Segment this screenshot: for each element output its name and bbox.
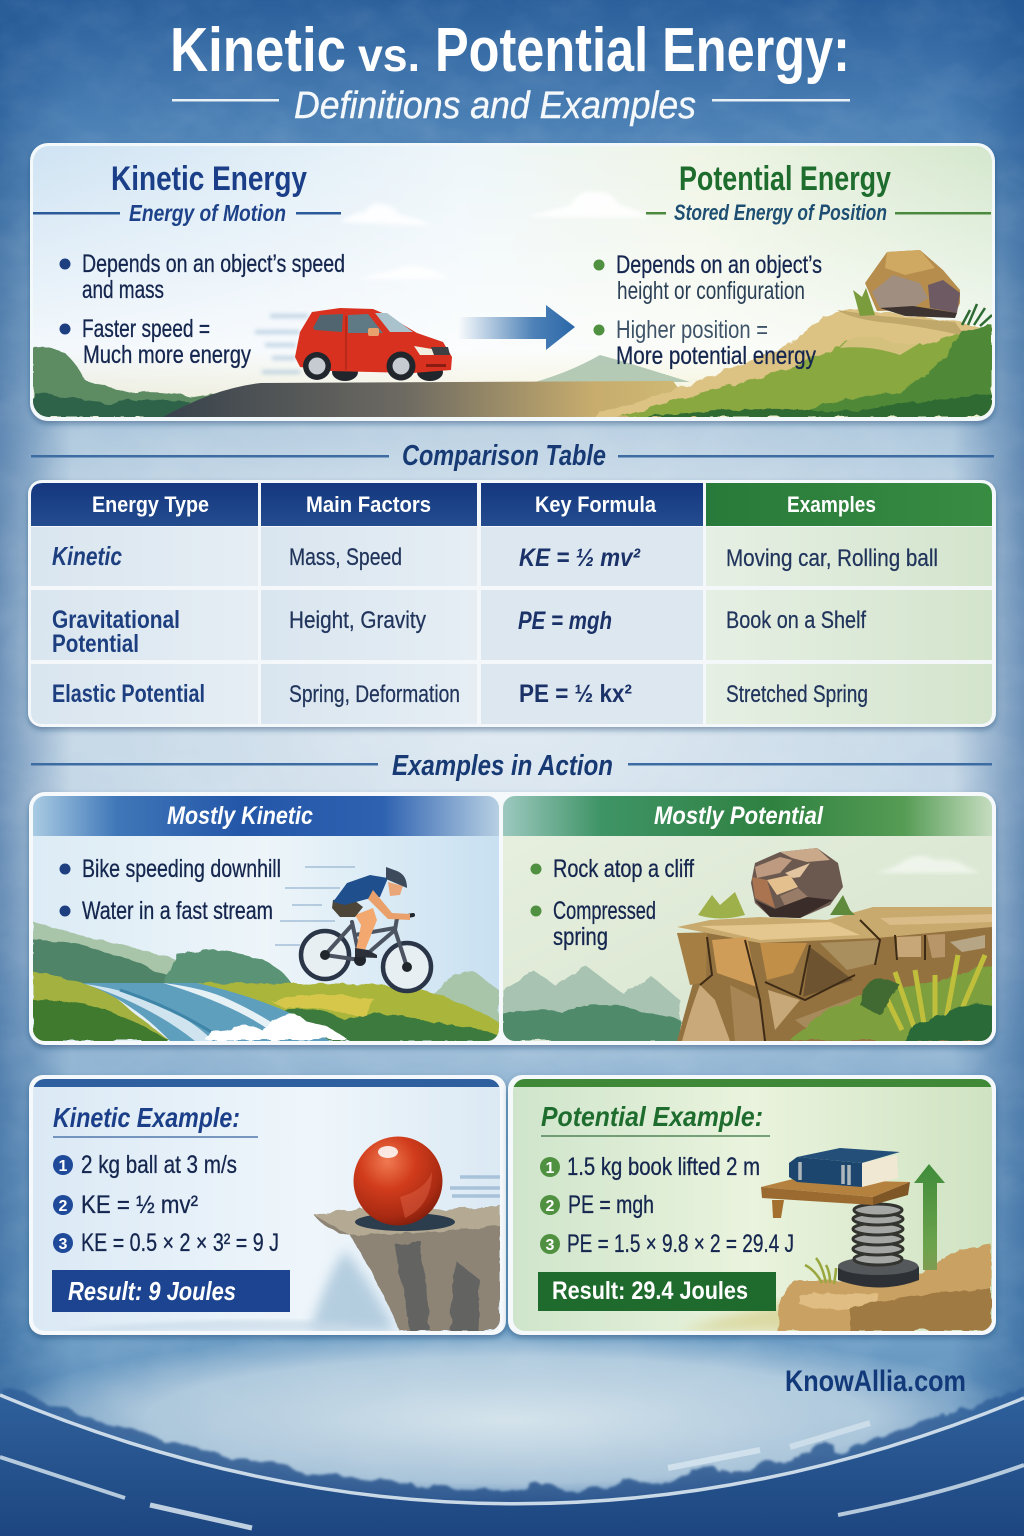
kinetic bullets: Depends on an object’s speed	[82, 250, 345, 278]
ground	[777, 1245, 992, 1331]
comparison table	[28, 480, 996, 727]
heading: examples in action: Examples in Action	[392, 750, 613, 782]
table row: kinetic: Mass, Speed	[289, 544, 402, 571]
left bushes	[33, 347, 215, 417]
potential examples list: Compressed	[553, 897, 656, 925]
steps: potential: PE = mgh	[568, 1191, 654, 1219]
steps: kinetic: 1	[59, 1158, 68, 1175]
table row: gravitational potential: PE = mgh	[518, 607, 612, 635]
table row: kinetic: Moving car, Rolling ball	[726, 545, 938, 572]
table row: kinetic	[31, 527, 992, 586]
table header: Main Factors	[306, 492, 431, 517]
heading: comparison table: Comparison Table	[402, 440, 606, 472]
steps: potential: PE = 1.5 × 9.8 × 2 = 29.4 J	[567, 1230, 794, 1258]
steps: potential	[540, 1153, 794, 1258]
table row: kinetic: KE = ½ mv²	[519, 544, 641, 572]
potential subheading: Stored Energy of Position	[674, 200, 887, 225]
table row: gravitational potential: Book on a Shelf	[726, 607, 866, 634]
potential heading: Potential Energy	[679, 160, 891, 198]
icon: book on spring	[761, 1148, 919, 1288]
result box: kinetic	[52, 1270, 290, 1312]
kinetic bullets: Faster speed =	[82, 315, 210, 343]
table row: gravitational potential: Height, Gravity	[289, 607, 426, 634]
arrow: upward height	[914, 1164, 945, 1270]
card: kinetic example	[29, 1075, 506, 1335]
heading: mostly potential: Mostly Potential	[654, 802, 824, 830]
arrow: kinetic to potential	[458, 305, 575, 350]
potential bullets	[594, 251, 822, 370]
hill	[590, 309, 992, 417]
table row: elastic potential	[31, 664, 992, 724]
cloud	[875, 856, 980, 873]
table row: elastic potential: PE = ½ kx²	[519, 680, 632, 708]
kinetic bullets: Much more energy	[83, 341, 251, 369]
grass hill	[33, 972, 170, 1041]
mist	[310, 1250, 395, 1331]
title	[170, 16, 850, 85]
steps: potential: 3	[546, 1237, 555, 1254]
table row: gravitational potential: Gravitational	[52, 606, 180, 634]
potential bullets: Depends on an object’s	[616, 251, 822, 279]
table header: Energy Type	[92, 492, 209, 517]
steps: potential: 2	[546, 1198, 555, 1215]
kinetic examples list	[60, 855, 281, 925]
panel: mostly kinetic	[33, 794, 499, 1041]
mountains	[503, 965, 680, 1041]
heading: potential example: Potential Example:	[541, 1101, 763, 1132]
heading: mostly kinetic: Mostly Kinetic	[167, 802, 313, 830]
potential examples list: spring	[553, 923, 608, 951]
steps: kinetic: KE = ½ mv²	[81, 1191, 198, 1219]
result box: potential: Result: 29.4 Joules	[552, 1277, 748, 1305]
icon: red car	[255, 308, 452, 381]
steps: kinetic	[53, 1151, 279, 1257]
icon: cyclist	[275, 867, 431, 991]
table row: elastic potential: Elastic Potential	[52, 680, 205, 708]
table row: gravitational potential: Potential	[52, 630, 139, 658]
panel: kinetic vs potential overview	[30, 143, 995, 421]
result box: potential	[538, 1272, 776, 1311]
rock	[865, 250, 960, 318]
cliff	[677, 907, 992, 1041]
distant mountain	[535, 355, 690, 382]
table row: gravitational potential	[31, 590, 992, 660]
steps: kinetic: 3	[59, 1236, 68, 1253]
table row: elastic potential: Spring, Deformation	[289, 681, 460, 708]
steps: potential: 1.5 kg book lifted 2 m	[567, 1153, 760, 1181]
kinetic subheading: Energy of Motion	[129, 200, 286, 226]
card: potential example	[508, 1075, 996, 1335]
kinetic heading: Kinetic Energy	[111, 160, 307, 198]
potential bullets: height or configuration	[617, 277, 805, 305]
water stream	[82, 983, 348, 1041]
panel frame: examples in action	[29, 792, 996, 1045]
steps: kinetic: KE = 0.5 × 2 × 3² = 9 J	[81, 1229, 279, 1257]
subtitle: Definitions and Examples	[294, 85, 696, 127]
kinetic examples list: Water in a fast stream	[82, 897, 273, 925]
heading: kinetic example: Kinetic Example:	[53, 1102, 240, 1133]
result box: kinetic: Result: 9 Joules	[68, 1276, 236, 1306]
grass	[790, 965, 992, 1041]
kinetic examples list: Bike speeding downhill	[82, 855, 281, 883]
potential bullets: Higher position =	[616, 316, 768, 344]
title: vs.	[358, 29, 420, 81]
table row: elastic potential: Stretched Spring	[726, 681, 868, 708]
hills and trees	[33, 922, 176, 986]
steps: kinetic: 2 kg ball at 3 m/s	[81, 1151, 237, 1179]
icon: red ball	[354, 1136, 442, 1226]
kinetic bullets	[60, 250, 345, 369]
title: Potential Energy:	[435, 16, 850, 85]
speed lines	[450, 1177, 500, 1196]
footer: website: KnowAllia.com	[785, 1365, 966, 1398]
table header: Key Formula	[535, 492, 657, 517]
table row: kinetic: Kinetic	[52, 541, 122, 571]
potential examples list: Rock atop a cliff	[553, 855, 694, 883]
panel: mostly potential	[503, 794, 992, 1041]
clouds	[340, 191, 650, 279]
table header: Examples	[787, 492, 876, 517]
icon: rock on cliff	[751, 848, 843, 918]
cliff	[314, 1205, 500, 1331]
road	[163, 381, 700, 417]
steps: potential: 1	[546, 1160, 555, 1177]
kinetic bullets: and mass	[82, 276, 164, 304]
steps: kinetic: 2	[59, 1198, 68, 1215]
potential bullets: More potential energy	[616, 342, 816, 370]
title: Kinetic	[170, 16, 346, 85]
table header	[31, 483, 992, 526]
potential examples list	[530, 855, 694, 951]
road arcs	[0, 1395, 1024, 1528]
